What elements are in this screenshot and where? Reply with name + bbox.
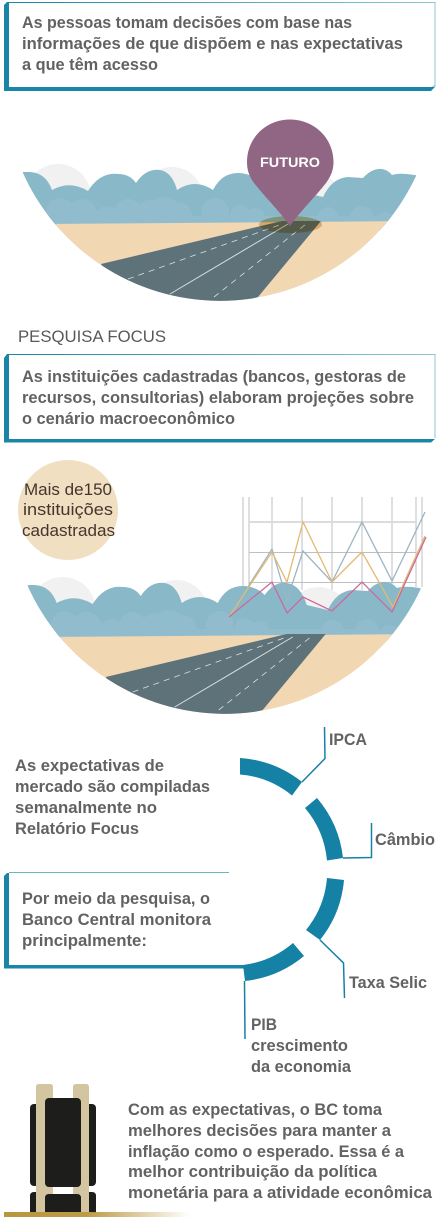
marker shadow [259, 216, 322, 233]
panel: institutions statement box: recursos, consultorias) elaboram projeções sobre [22, 388, 414, 407]
icon: FUTURO location pin [247, 120, 334, 226]
text: weekly compilation [15, 756, 210, 838]
panel: institutions statement box: o cenário macroeconômico [22, 409, 235, 428]
badge: more than 150 institutions: Mais de150 [24, 480, 112, 499]
ring segment: PIB [243, 943, 352, 1076]
illustration: road with clouds [25, 577, 425, 723]
ring segment: Cambio: Câmbio [375, 830, 435, 849]
icon: building [30, 1084, 96, 1213]
panel: intro statement box: a que têm acesso [22, 55, 158, 74]
panel: institutions statement box: As instituições cadastradas (bancos, gestoras de [22, 367, 406, 386]
heading: Pesquisa Focus: PESQUISA FOCUS [18, 327, 166, 346]
ring segment: Taxa Selic: Taxa Selic [349, 973, 427, 992]
text: conclusion: inflação como o esperado. Essa é a [128, 1142, 405, 1161]
ring segment: Cambio [305, 798, 435, 860]
illustration: road toward the future [20, 164, 420, 310]
ring segment: PIB: crescimento [251, 1036, 348, 1055]
text: conclusion: melhor contribuição da política [128, 1162, 378, 1181]
text: conclusion: melhores decisões para manter a [128, 1121, 392, 1140]
ring segment: IPCA: IPCA [329, 730, 367, 749]
panel: central bank monitors box [4, 872, 245, 968]
text: weekly compilation: semanalmente no [15, 798, 157, 817]
line chart: projections [229, 512, 426, 617]
series: gold [229, 522, 425, 617]
panel: intro statement box [4, 2, 435, 91]
panel: central bank monitors box: Banco Central monitora [22, 910, 212, 929]
chart grid [243, 497, 422, 612]
series: blue-gray [229, 512, 425, 617]
ring segment: Taxa Selic [306, 878, 427, 998]
text: conclusion: Com as expectativas, o BC toma [128, 1100, 383, 1119]
badge: more than 150 institutions: instituições [23, 500, 113, 519]
ground line [4, 1212, 190, 1217]
panel: central bank monitors box: Por meio da pesquisa, o [22, 889, 210, 908]
ring segment: PIB: da economia [251, 1057, 352, 1076]
ring segment: IPCA [240, 727, 367, 796]
series: pink [229, 537, 426, 617]
text: conclusion: monetária para a atividade econômica [128, 1183, 433, 1202]
panel: intro statement box: informações de que dispõem e nas expectativas [22, 34, 403, 53]
text: conclusion [128, 1100, 433, 1202]
ring segment: PIB: PIB [251, 1015, 277, 1034]
badge: more than 150 institutions [18, 460, 118, 560]
badge: more than 150 institutions: cadastradas [22, 521, 115, 540]
text: weekly compilation: Relatório Focus [15, 819, 139, 838]
panel: intro statement box: As pessoas tomam decisões com base nas [22, 13, 352, 32]
icon: FUTURO location pin: FUTURO [260, 154, 320, 170]
panel: central bank monitors box: principalmente: [22, 931, 147, 950]
text: weekly compilation: mercado são compiladas [15, 777, 210, 796]
text: weekly compilation: As expectativas de [15, 756, 164, 775]
panel: institutions statement box [4, 354, 435, 442]
